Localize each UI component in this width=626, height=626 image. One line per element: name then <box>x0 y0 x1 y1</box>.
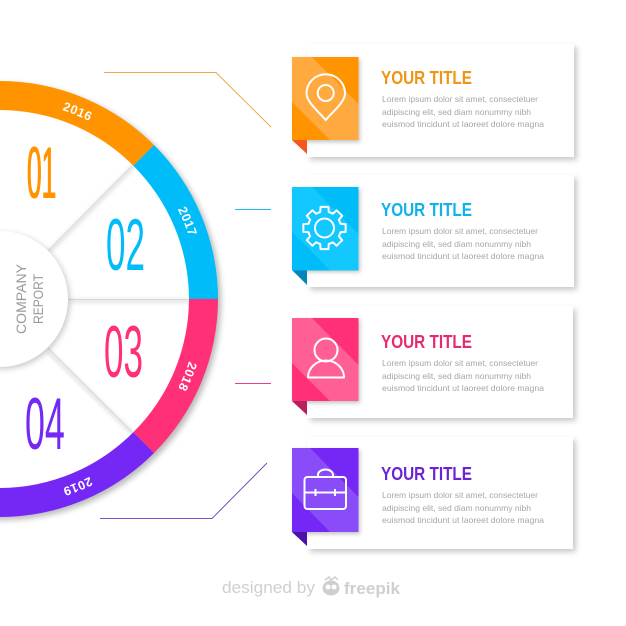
icon: gear <box>303 207 346 249</box>
year 2019: 2019 <box>64 476 92 496</box>
text block 2: Lorem ipsum dolor sit amet, consectetuer <box>382 226 538 236</box>
panel: card 4 <box>292 437 576 552</box>
title 1: YOUR TITLE <box>381 68 472 88</box>
icon: briefcase <box>304 470 346 509</box>
freepik credit: freepik <box>344 579 401 598</box>
year 2016: 2016 <box>62 102 92 120</box>
panel: card 2 <box>292 175 577 290</box>
number 02: 02 <box>106 205 145 286</box>
panel: card 1 <box>292 44 577 160</box>
text block 3 <box>382 358 544 393</box>
text block 1: euismod tincidunt ut laoreet dolore magna <box>382 119 544 129</box>
ribbon 4 <box>292 448 360 546</box>
segment 2016 <box>0 81 154 166</box>
center hub <box>0 231 70 369</box>
number 03: 03 <box>104 312 143 393</box>
title 3: YOUR TITLE <box>381 332 472 352</box>
year 2017: 2017 <box>178 206 197 234</box>
center hub: COMPANY <box>13 263 29 334</box>
ribbon 2 <box>292 187 360 285</box>
spokes <box>48 165 189 435</box>
text block 1: adipiscing elit, sed diam nonummy nibh <box>382 107 531 117</box>
freepik credit <box>222 577 401 598</box>
year 2018: 2018 <box>178 362 196 391</box>
text block 2: euismod tincidunt ut laoreet dolore magna <box>382 251 544 261</box>
icon: map pin <box>306 74 345 120</box>
segment 2018 <box>133 299 218 453</box>
text block 1: Lorem ipsum dolor sit amet, consectetuer <box>382 94 538 104</box>
segment 2019 <box>0 432 154 517</box>
text block 3: euismod tincidunt ut laoreet dolore magna <box>382 383 544 393</box>
text block 2: adipiscing elit, sed diam nonummy nibh <box>382 239 531 249</box>
segment 2017 <box>133 145 218 299</box>
wheel <box>0 81 224 523</box>
ribbon 3 <box>292 318 360 415</box>
text block 4: euismod tincidunt ut laoreet dolore magna <box>382 515 544 525</box>
title 2: YOUR TITLE <box>381 200 472 220</box>
connector lines <box>100 72 271 518</box>
text block 2 <box>382 226 544 261</box>
number 01: 01 <box>27 133 56 214</box>
freepik credit: designed by <box>222 578 316 597</box>
ribbon 1 <box>292 57 360 154</box>
icon: person <box>308 338 344 378</box>
number 04: 04 <box>25 384 65 465</box>
center hub: REPORT <box>30 274 46 324</box>
text block 4: adipiscing elit, sed diam nonummy nibh <box>382 503 531 513</box>
title 4: YOUR TITLE <box>381 464 472 484</box>
text block 4 <box>382 490 544 525</box>
panel: card 3 <box>292 306 576 421</box>
text block 1 <box>382 94 544 129</box>
icon: freepik mascot <box>322 577 340 596</box>
text block 3: adipiscing elit, sed diam nonummy nibh <box>382 371 531 381</box>
text block 4: Lorem ipsum dolor sit amet, consectetuer <box>382 490 538 500</box>
text block 3: Lorem ipsum dolor sit amet, consectetuer <box>382 358 538 368</box>
